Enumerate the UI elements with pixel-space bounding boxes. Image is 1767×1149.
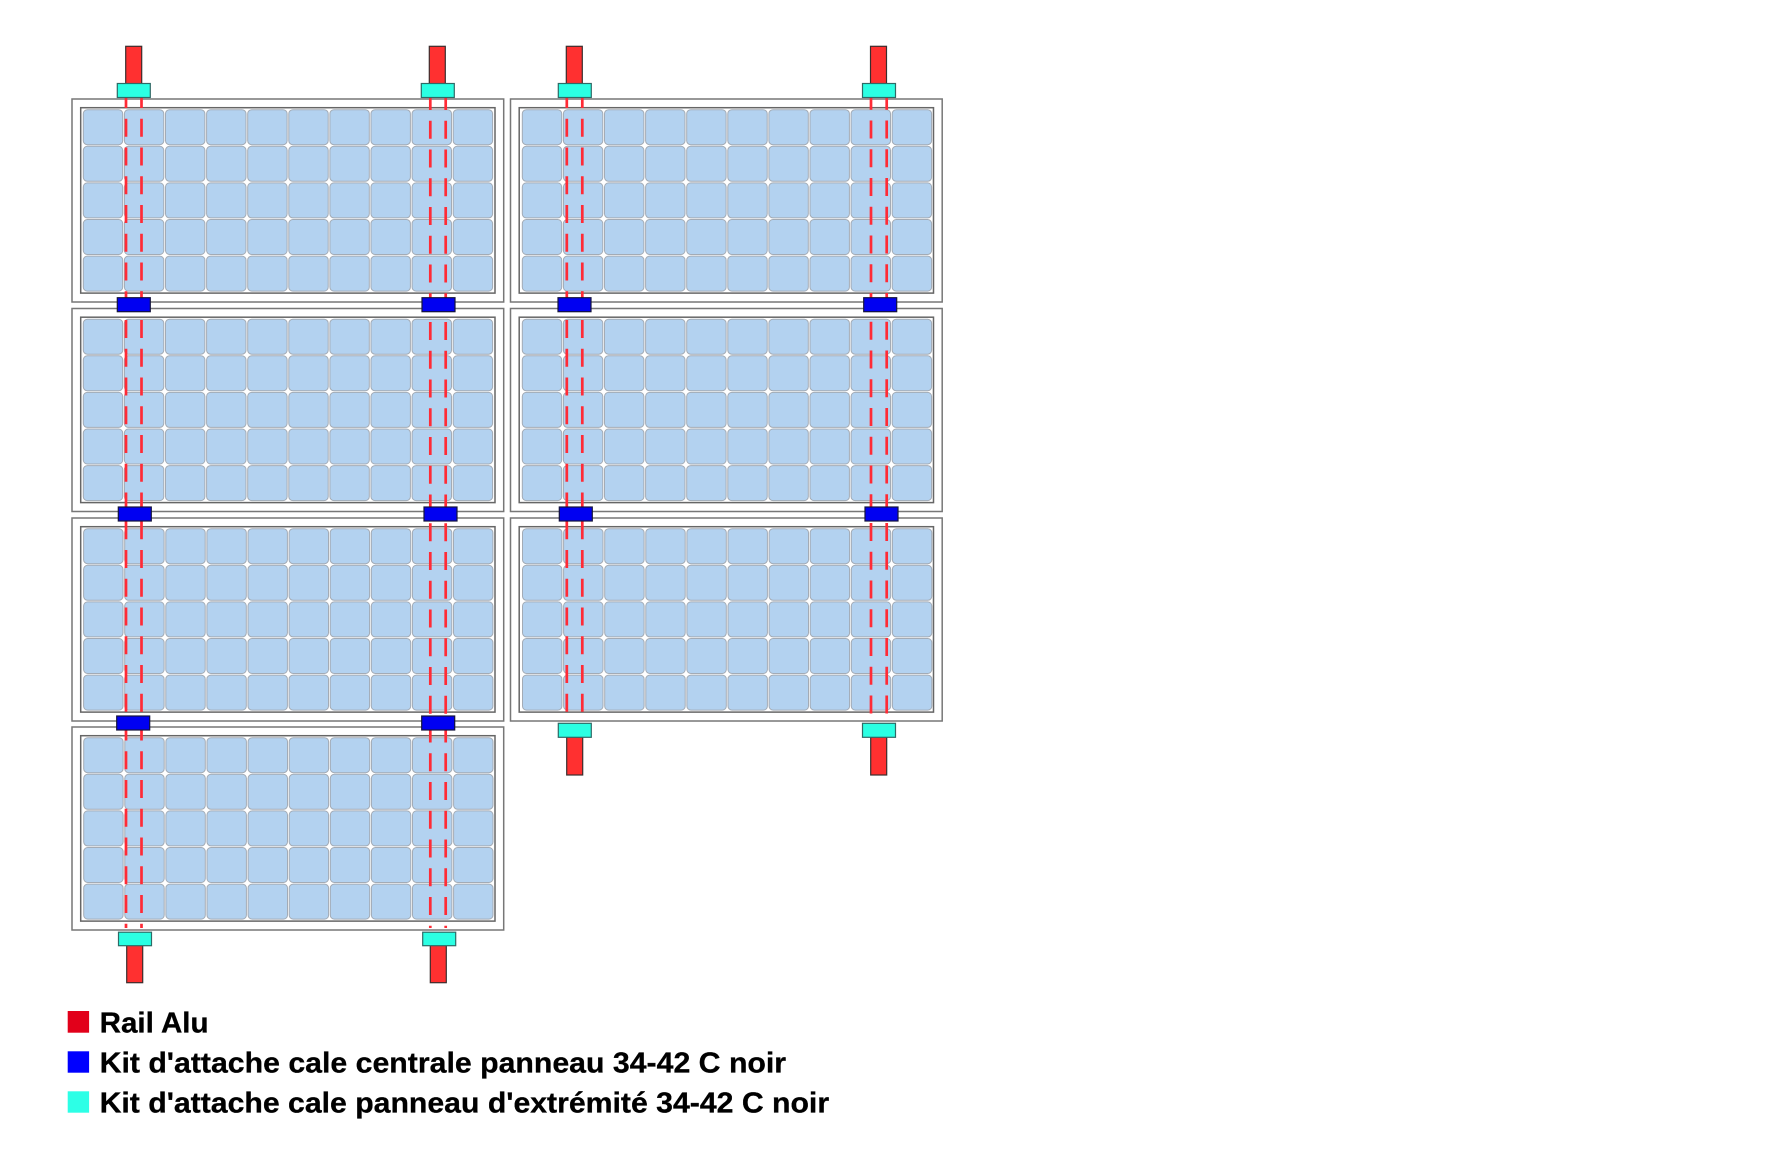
panel: left column row 4 xyxy=(72,727,504,930)
legend item: rail: Rail Alu xyxy=(100,1007,209,1039)
aluminium rail ends xyxy=(126,46,887,983)
legend item: centre clamp: Kit d'attache cale centrale panneau 34-42 C noir xyxy=(100,1047,786,1079)
panel: left column row 2 xyxy=(72,308,504,512)
end clamps (cyan) xyxy=(117,84,896,946)
panel: right column row 1 xyxy=(510,99,942,302)
solar panels array xyxy=(72,99,942,930)
panel: right column row 3 xyxy=(510,518,942,721)
panel: left column row 3 xyxy=(72,518,504,721)
panel: right column row 2 xyxy=(510,308,942,512)
legend xyxy=(68,1007,829,1119)
centre clamps (blue) xyxy=(117,298,898,730)
panel: left column row 1 xyxy=(72,99,504,302)
legend item: end clamp: Kit d'attache cale panneau d'extrémité 34-42 C noir xyxy=(100,1087,829,1119)
hidden rail lines (dashed) xyxy=(126,90,887,928)
